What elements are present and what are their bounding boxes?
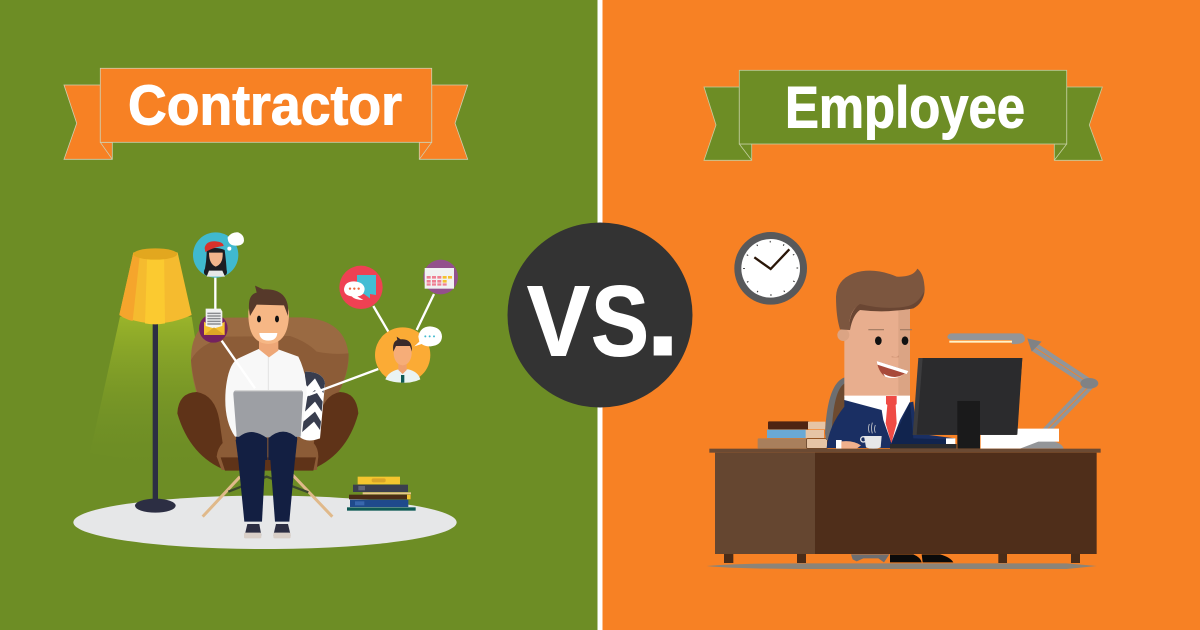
floor lamp (90, 248, 217, 513)
knees (236, 432, 267, 460)
neck and head (259, 335, 278, 357)
laptop (233, 391, 303, 437)
icon: mail (199, 309, 228, 343)
shoes (890, 554, 953, 562)
man (225, 286, 307, 538)
panel: employee background (602, 0, 1200, 630)
books (347, 477, 416, 511)
VS badge: V (527, 266, 590, 378)
heading: Contractor ribbon (64, 68, 468, 159)
businessman (827, 269, 955, 449)
illustration: employee at desk (707, 232, 1101, 569)
heading: Contractor ribbon: Contractor (128, 74, 402, 138)
chair wheels (851, 554, 889, 562)
VS badge: . (645, 241, 681, 384)
illustration: contractor in armchair (73, 232, 458, 549)
chevron pillow (299, 372, 325, 440)
icon: calendar (423, 260, 458, 294)
panel: contractor background (0, 0, 598, 630)
wall clock (734, 232, 807, 305)
rug (73, 496, 457, 549)
divider (598, 0, 602, 630)
floor shadow (707, 563, 1097, 569)
books (758, 421, 827, 449)
coffee cup (861, 423, 882, 449)
shirt (225, 348, 307, 437)
VS badge (508, 222, 692, 408)
trousers (236, 433, 267, 522)
desk lamp (947, 333, 1098, 449)
desk (709, 449, 1101, 563)
paper stack (981, 429, 1059, 449)
connector lines (215, 277, 434, 395)
heading: Employee ribbon: Employee (785, 75, 1025, 140)
icon: man avatar (375, 326, 442, 383)
icon: woman avatar (193, 232, 244, 278)
armchair (177, 317, 358, 517)
office chair back (825, 377, 845, 440)
icon: chat (339, 266, 383, 309)
heading: Employee ribbon (704, 70, 1102, 160)
monitor (890, 358, 1022, 449)
VS badge: S (591, 266, 649, 378)
shoes (244, 524, 261, 535)
